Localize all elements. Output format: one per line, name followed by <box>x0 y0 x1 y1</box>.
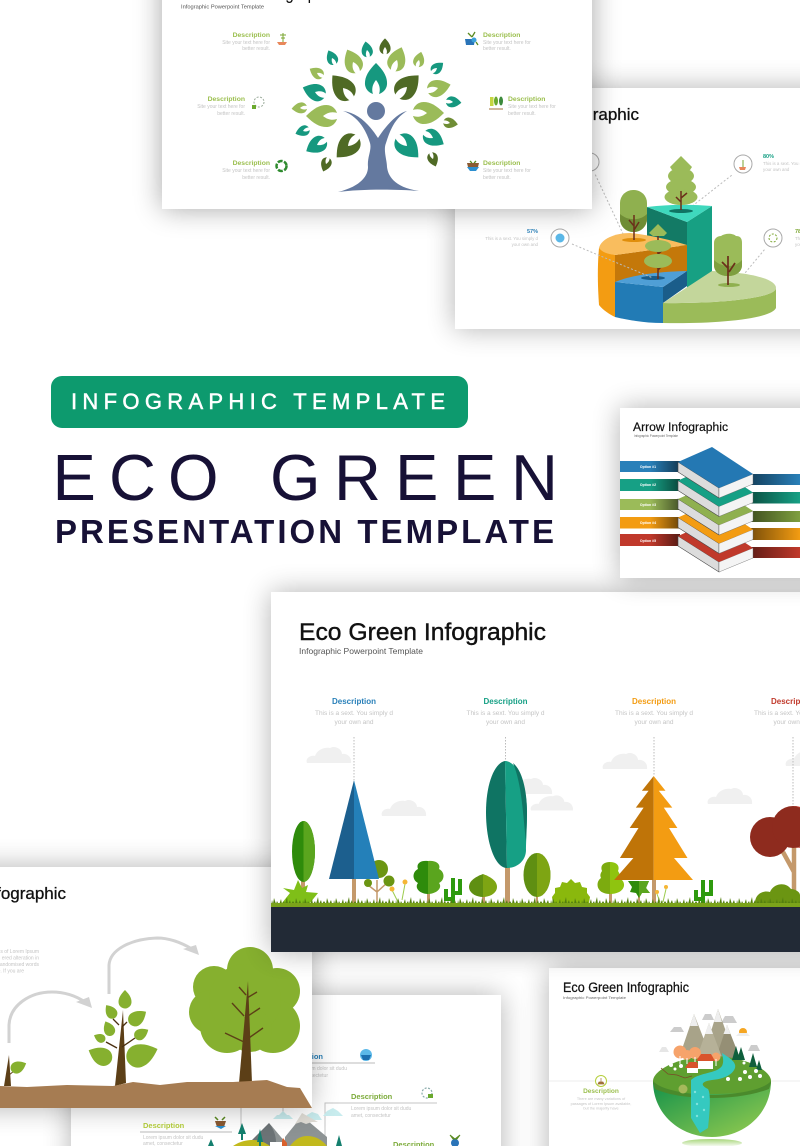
description: right 2 <box>489 96 556 117</box>
column: blue description: your own and <box>334 719 374 726</box>
orange pine tree <box>614 776 693 904</box>
column: blue description: This is a sext. You simply d <box>315 710 393 717</box>
left option bands: Option #1 <box>640 465 656 469</box>
column: orange description: Description <box>632 697 676 706</box>
description: left 2: Site your text here for <box>197 104 245 110</box>
dotted leader lines <box>595 174 765 285</box>
ground <box>0 1080 312 1108</box>
text block: s of Lorem Ipsum <box>0 949 39 955</box>
description: recycling: amet, consectetur <box>351 1113 391 1119</box>
slide: stacked description infographic <box>71 995 501 1146</box>
subtitle: Infographic Powerpoint Template <box>634 434 678 438</box>
description: recycling: Lorem ipsum dolor sit dudu <box>351 1106 412 1112</box>
column: teal description: your own and <box>486 719 525 726</box>
description: left 1: Description <box>233 32 270 39</box>
labels <box>485 154 800 247</box>
description: right 1: Description <box>483 32 520 39</box>
description: left 3 <box>222 160 286 181</box>
subtitle: Infographic Powerpoint Template <box>299 646 423 656</box>
flowers <box>390 880 408 902</box>
slide: tree of life infographic <box>162 0 592 209</box>
description: water: Description <box>282 1052 323 1061</box>
labels: your own and <box>512 242 539 247</box>
arrow: sprout to sapling <box>9 992 92 1043</box>
text block: ered alteration in <box>2 956 39 962</box>
title: Eco Green Infographic <box>299 619 546 646</box>
description: left 2: better result. <box>217 111 245 117</box>
description: Description <box>583 1088 619 1095</box>
grass <box>271 893 800 907</box>
grass tuft <box>282 880 318 903</box>
column: teal description: This is a sext. You simply d <box>466 710 545 717</box>
small olive tree <box>364 860 394 903</box>
column: teal description: Description <box>483 697 528 706</box>
pie: teal slice <box>647 205 712 292</box>
title: Eco Green Infographic <box>469 106 639 124</box>
dark star bush <box>628 881 650 903</box>
light green tree <box>598 862 624 903</box>
description: soil: Description <box>143 1121 185 1130</box>
description: right 3: Site your text here for <box>483 168 531 174</box>
description: right 1 <box>465 32 531 52</box>
headline: eco green: ECO GREEN <box>52 441 558 514</box>
description: water: Lorem ipsum dolor sit dudu <box>287 1066 347 1072</box>
green oval tree <box>292 821 315 900</box>
description: left 2: Description <box>208 96 245 103</box>
description: right 3: better result. <box>483 175 511 181</box>
icon circles <box>551 153 782 247</box>
description: left 3: better result. <box>242 175 270 181</box>
column: blue description: Description <box>332 697 376 706</box>
labels: 57% <box>527 229 538 235</box>
red round tree <box>750 806 800 905</box>
right bands <box>750 474 800 558</box>
description: right 1: Site your text here for <box>483 40 531 46</box>
flowers <box>655 885 668 902</box>
left option bands: Option #3 <box>640 503 656 507</box>
column: orange description: your own and <box>634 719 674 726</box>
description: left 1 <box>222 32 287 52</box>
leaves <box>291 38 462 173</box>
description: right 2: better result. <box>508 111 536 117</box>
left option bands: Option #4 <box>640 521 656 525</box>
sapling <box>85 990 161 1086</box>
pie: orange slice <box>598 233 687 317</box>
description: left 3: Description <box>233 160 270 167</box>
slide: globe infographic <box>549 968 800 1146</box>
title: Arrow Infographic <box>633 422 728 434</box>
labels: This is a sext. You simply d <box>485 236 539 241</box>
labels: 80% <box>763 154 774 160</box>
green oval tree right <box>524 853 550 903</box>
teal tall tree <box>486 761 527 903</box>
slide: main eco green landscape <box>271 592 800 952</box>
description: right 1: better result. <box>483 46 511 52</box>
green hump bush <box>755 884 800 903</box>
bushy tree <box>414 861 444 903</box>
column: orange description: This is a sext. You simply d <box>615 710 693 717</box>
description: recycling: Description <box>351 1092 393 1101</box>
column: red description <box>754 697 800 806</box>
description: soil: Lorem ipsum dolor sit dudu <box>143 1135 204 1141</box>
description: plant and globe <box>393 1135 460 1146</box>
column: teal description <box>466 697 545 762</box>
pine tree <box>664 156 698 213</box>
description: left 2 <box>197 96 264 117</box>
person figure <box>338 102 419 192</box>
description: right 2: Description <box>508 96 545 103</box>
description: but the majority have <box>583 1106 619 1110</box>
mountain landscape <box>208 1103 343 1146</box>
description: recycling <box>325 1088 437 1138</box>
text block <box>0 949 39 974</box>
headline: presentation template: PRESENTATION TEMPLATE <box>55 513 554 550</box>
slide: arrow infographic <box>620 408 800 578</box>
badge: infographic template <box>51 376 468 428</box>
floating island <box>653 1009 771 1146</box>
leader line: water <box>572 244 653 278</box>
slide: growth infographic <box>0 867 312 1108</box>
pie: green slice <box>663 271 776 323</box>
text block: andomised words <box>0 962 39 968</box>
description: left 1: better result. <box>242 46 270 52</box>
left option bands: Option #5 <box>640 539 656 543</box>
description: water <box>240 1049 375 1079</box>
description: left 1: Site your text here for <box>222 40 270 46</box>
column: blue description <box>315 697 393 780</box>
left option bands <box>620 461 680 546</box>
description: right 3: Description <box>483 160 520 167</box>
cactus <box>446 878 460 904</box>
description: passages of Lorem Ipsum available, <box>571 1102 631 1106</box>
cactus <box>696 880 711 904</box>
middle tree <box>641 224 672 280</box>
rounded tree <box>620 190 647 242</box>
stacked books <box>678 447 753 572</box>
slide: 3D pie chart infographic <box>455 88 800 329</box>
description: There are many variations of <box>577 1097 626 1101</box>
clouds <box>307 747 800 816</box>
title: Eco Green Infographic <box>563 980 689 995</box>
description: left 3: Site your text here for <box>222 168 270 174</box>
blue triangle tree <box>329 780 379 903</box>
column: orange description <box>615 697 693 776</box>
subtitle: Infographic Powerpoint Template <box>563 995 627 1000</box>
arrow: sapling to tree <box>109 938 199 994</box>
round olive tree <box>469 874 497 903</box>
badge: infographic template: INFOGRAPHIC TEMPLATE <box>71 389 445 414</box>
description: right 3 <box>467 160 531 181</box>
sprout <box>4 1055 29 1086</box>
pie: blue slice <box>615 271 687 323</box>
subtitle: Infographic Powerpoint Template <box>181 4 264 10</box>
description: soil <box>140 1117 232 1146</box>
left option bands: Option #2 <box>640 483 656 487</box>
description: water: amet, consectetur <box>288 1073 328 1079</box>
spiky bush <box>552 879 590 903</box>
big tree <box>189 947 300 1083</box>
description: right 2: Site your text here for <box>508 104 556 110</box>
dark band <box>271 907 800 952</box>
labels: your own and <box>763 167 790 172</box>
description <box>571 1076 631 1110</box>
right tree <box>714 234 742 287</box>
